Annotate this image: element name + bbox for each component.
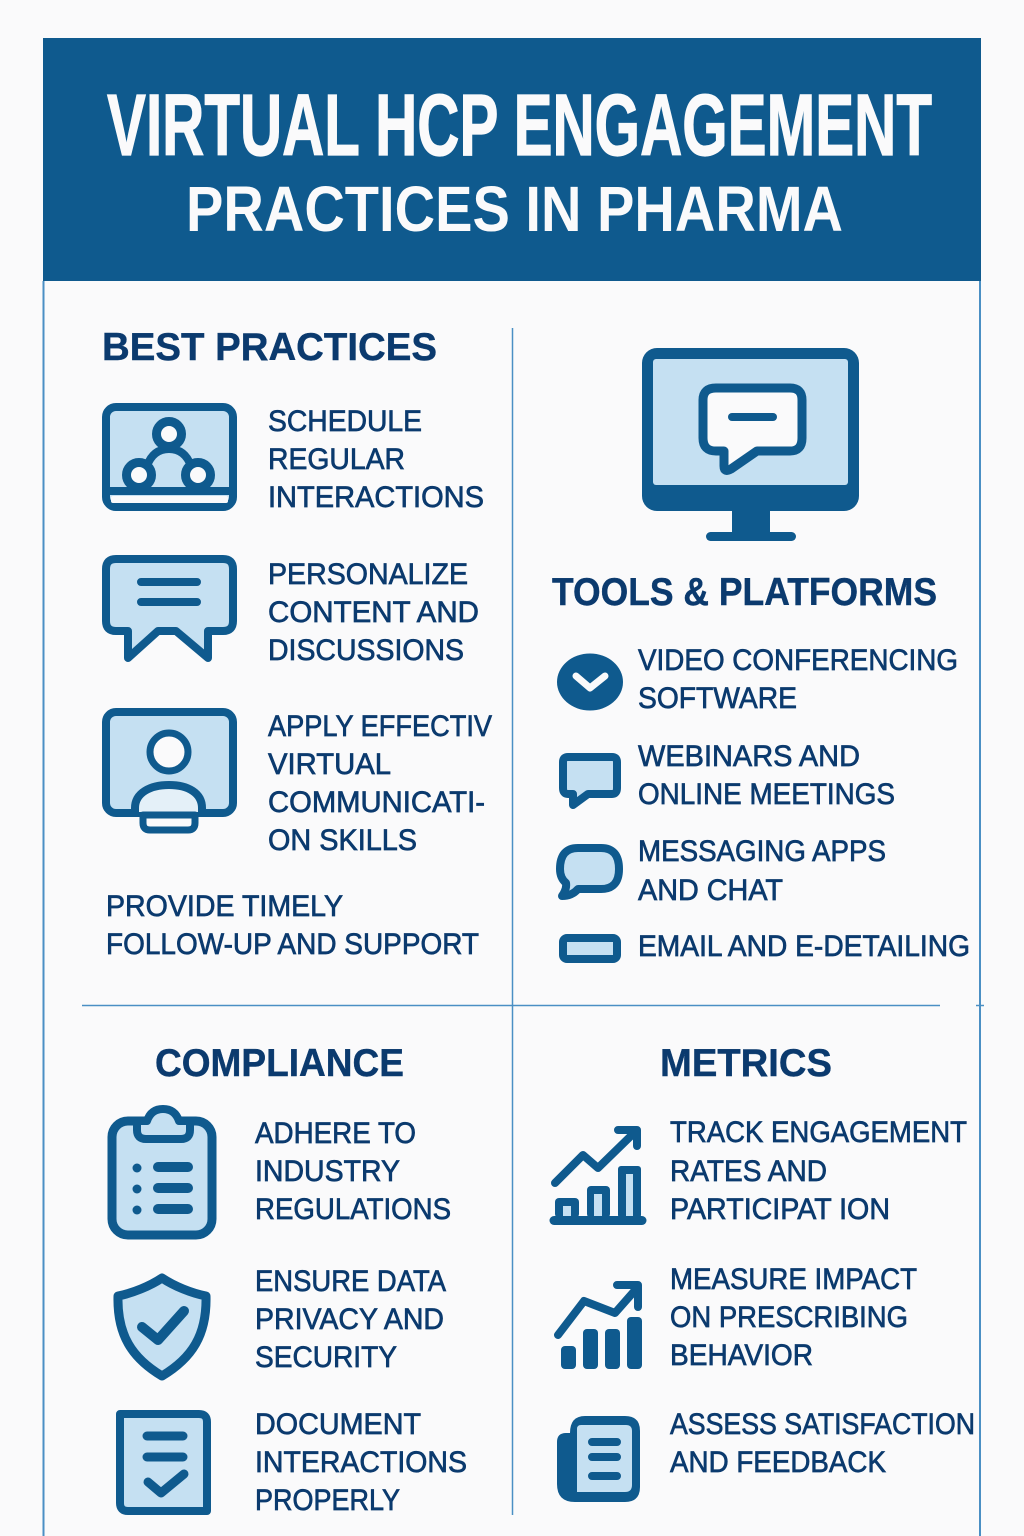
text: apply effective virtual communication skills: VIRTUAL bbox=[268, 748, 391, 781]
text: webinars and online meetings: ONLINE MEETINGS bbox=[638, 778, 895, 811]
text: adhere to industry regulations: REGULATIONS bbox=[255, 1193, 451, 1226]
text: document interactions properly bbox=[255, 1408, 467, 1517]
icon: column chart with trend arrow bbox=[558, 1285, 642, 1369]
text: adhere to industry regulations: INDUSTRY bbox=[255, 1155, 400, 1188]
text: document interactions properly: PROPERLY bbox=[255, 1484, 400, 1517]
text: document interactions properly: INTERACTIONS bbox=[255, 1446, 467, 1479]
text: messaging apps and chat: AND CHAT bbox=[638, 874, 783, 907]
text: schedule regular interactions bbox=[268, 405, 484, 514]
icon: bar chart with trend arrow bbox=[554, 1130, 642, 1220]
text: ensure data privacy and security bbox=[255, 1265, 446, 1374]
text: measure impact: ON PRESCRIBING bbox=[670, 1301, 908, 1334]
text: track engagement: TRACK ENGAGEMENT bbox=[670, 1116, 967, 1149]
text: assess satisfaction: AND FEEDBACK bbox=[670, 1446, 886, 1479]
text: adhere to industry regulations: ADHERE TO bbox=[255, 1117, 416, 1150]
text: provide timely follow-up: PROVIDE TIMELY bbox=[106, 890, 343, 923]
text: measure impact bbox=[670, 1263, 917, 1372]
text: video conferencing software bbox=[638, 644, 958, 715]
text: personalize content: PERSONALIZE bbox=[268, 558, 468, 591]
text: ensure data privacy and security: ENSURE DATA bbox=[255, 1265, 446, 1298]
text: webinars and online meetings: WEBINARS AND bbox=[638, 740, 860, 773]
text: webinars and online meetings bbox=[638, 740, 895, 811]
text: video conferencing software: VIDEO CONFERENCING bbox=[638, 644, 958, 677]
icon: presenter on screen bbox=[106, 712, 233, 830]
text: personalize content bbox=[268, 558, 479, 667]
panel: best practices bbox=[102, 326, 492, 961]
heading: tools and platforms: TOOLS & PLATFORMS bbox=[552, 571, 937, 614]
icon: shield with check bbox=[118, 1278, 206, 1376]
text: schedule regular interactions: SCHEDULE bbox=[268, 405, 422, 438]
text: personalize content: CONTENT AND bbox=[268, 596, 479, 629]
text: provide timely follow-up: FOLLOW-UP AND SUPPORT bbox=[106, 928, 479, 961]
icon: video meeting group bbox=[106, 407, 233, 507]
icon: email bar bbox=[563, 938, 617, 959]
text: messaging apps and chat bbox=[638, 835, 886, 907]
text: ensure data privacy and security: SECURITY bbox=[255, 1341, 397, 1374]
icon: clipboard checklist bbox=[112, 1109, 212, 1235]
text: track engagement: PARTICIPAT ION bbox=[670, 1193, 890, 1226]
text: video conferencing software: SOFTWARE bbox=[638, 682, 797, 715]
text: measure impact: BEHAVIOR bbox=[670, 1339, 813, 1372]
heading: best practices: BEST PRACTICES bbox=[102, 326, 437, 369]
icon: monitor with chat bubble bbox=[642, 348, 859, 541]
text: provide timely follow-up bbox=[106, 890, 479, 961]
text: apply effective virtual communication skills: COMMUNICATI- bbox=[268, 786, 485, 819]
text: track engagement bbox=[670, 1116, 967, 1226]
heading: metrics: METRICS bbox=[660, 1042, 832, 1085]
text: schedule regular interactions: INTERACTIONS bbox=[268, 481, 484, 514]
text: assess satisfaction bbox=[670, 1408, 975, 1479]
text: document interactions properly: DOCUMENT bbox=[255, 1408, 421, 1441]
text: messaging apps and chat: MESSAGING APPS bbox=[638, 835, 886, 868]
icon: speech bubble bbox=[106, 559, 233, 658]
panel: compliance bbox=[112, 1042, 467, 1517]
text: email and e-detailing: EMAIL AND E-DETAILING bbox=[638, 930, 970, 963]
text: track engagement: RATES AND bbox=[670, 1155, 827, 1188]
text: assess satisfaction: ASSESS SATISFACTION bbox=[670, 1408, 975, 1441]
icon: video check badge bbox=[557, 654, 623, 710]
heading: compliance: COMPLIANCE bbox=[155, 1042, 404, 1085]
icon: document with check bbox=[120, 1414, 207, 1511]
text: ensure data privacy and security: PRIVACY AND bbox=[255, 1303, 444, 1336]
subtitle: PRACTICES IN PHARMA bbox=[186, 173, 843, 245]
text: apply effective virtual communication skills: APPLY EFFECTIV bbox=[268, 710, 492, 743]
icon: feedback document bbox=[557, 1416, 640, 1502]
text: apply effective virtual communication skills: ON SKILLS bbox=[268, 824, 417, 857]
text: personalize content: DISCUSSIONS bbox=[268, 634, 464, 667]
panel: tools and platforms bbox=[552, 348, 970, 963]
icon: messaging bubble bbox=[560, 848, 619, 896]
text: measure impact: MEASURE IMPACT bbox=[670, 1263, 917, 1296]
icon: webinar bubble bbox=[563, 757, 617, 805]
text: apply effective virtual communication skills bbox=[268, 710, 492, 857]
title banner bbox=[43, 38, 981, 281]
panel: metrics bbox=[554, 1042, 975, 1502]
text: schedule regular interactions: REGULAR bbox=[268, 443, 405, 476]
text: adhere to industry regulations bbox=[255, 1117, 451, 1226]
